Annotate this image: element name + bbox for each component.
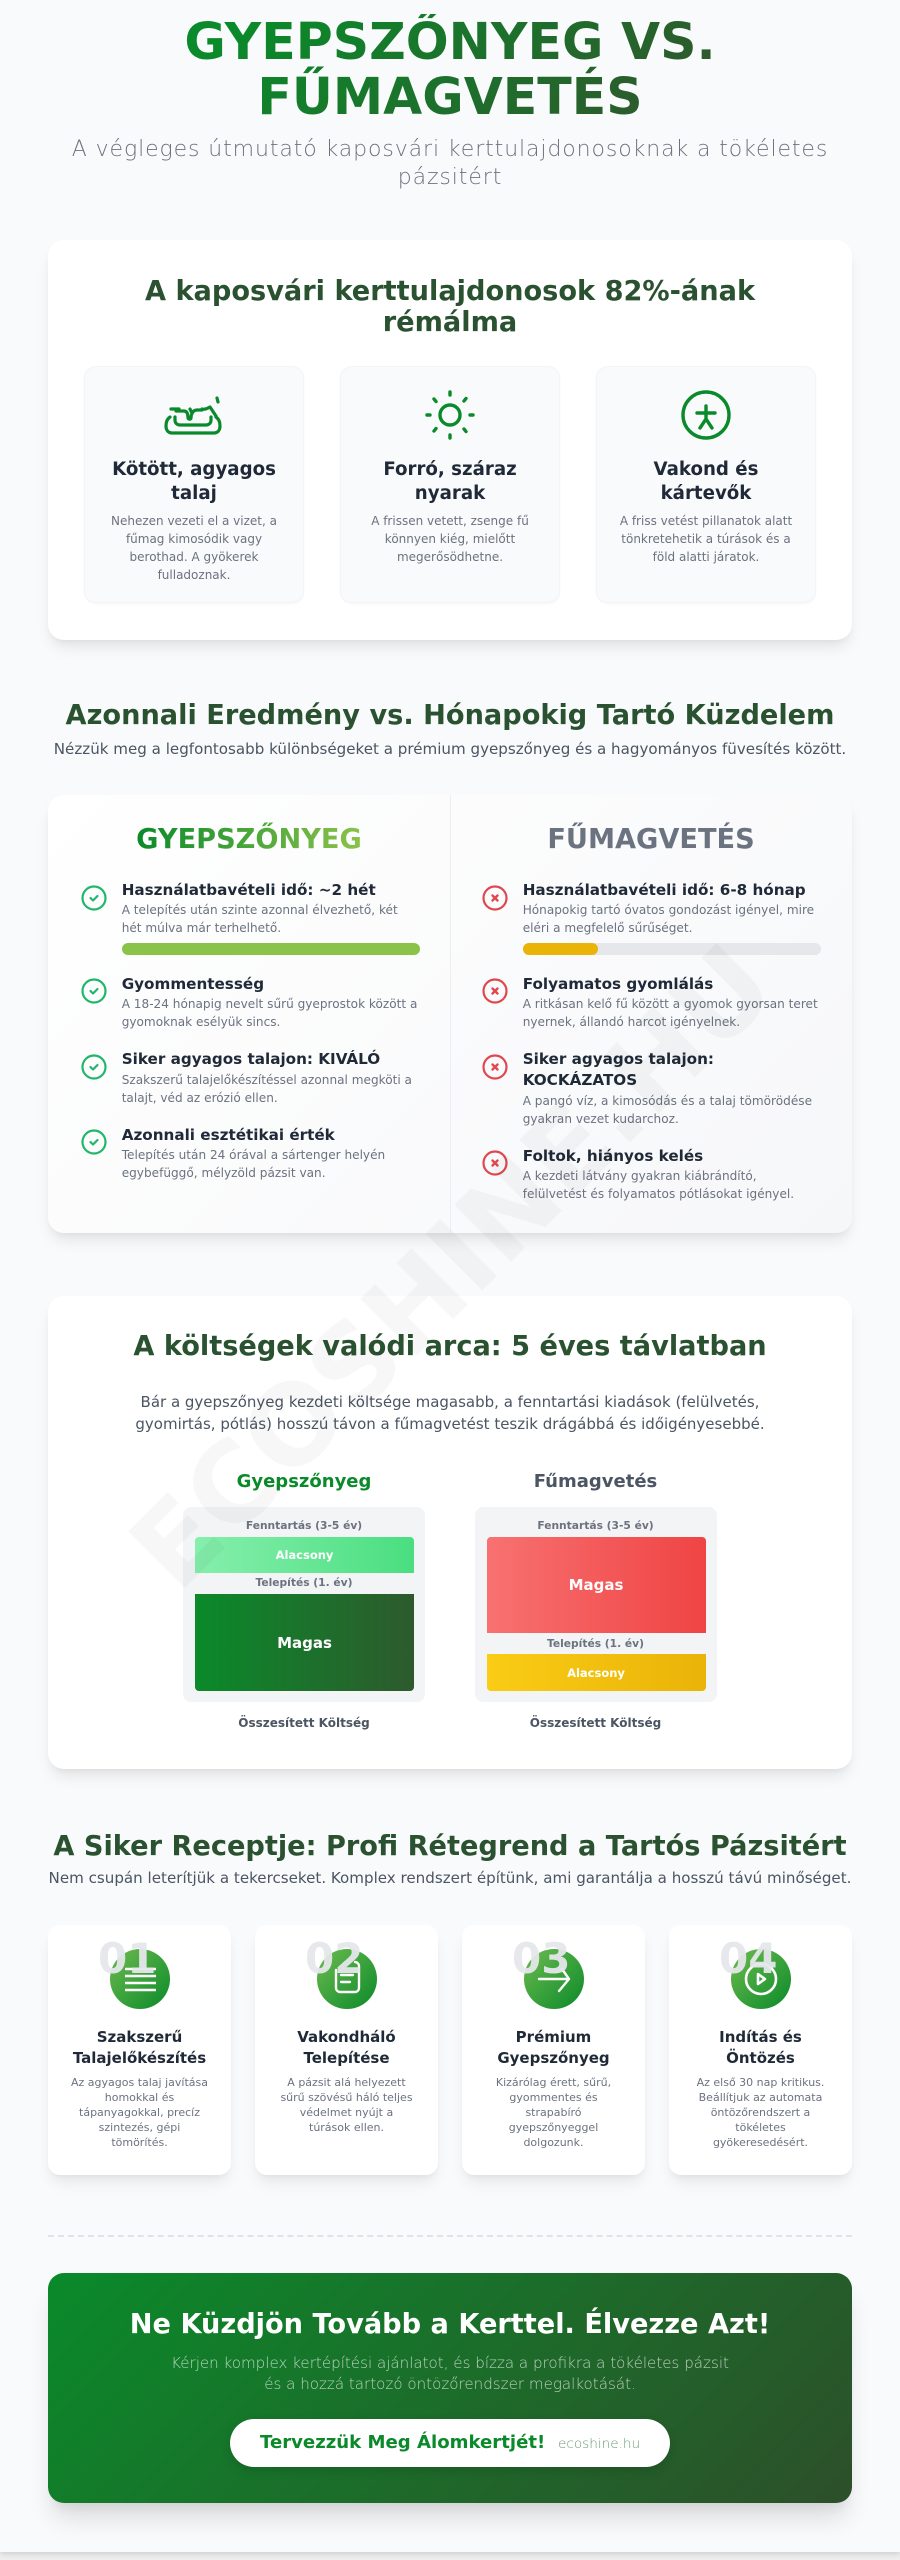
panel text: gyomirtás, pótlás) hosszú távon a fűmagvetést teszik drágábbá és időigényesebbé. [135, 1414, 765, 1432]
icon: layers lines [110, 1949, 170, 2009]
column divider [450, 795, 451, 1233]
step text [71, 2076, 208, 2149]
subtitle [72, 137, 828, 190]
label: Telepítés (1. év) [256, 1576, 352, 1589]
icon: clay soil [164, 396, 222, 435]
icon: mesh box [316, 1949, 376, 2009]
icon: check 3 [81, 1054, 107, 1080]
panel: comparison [48, 795, 852, 1233]
item: clay: talajt, véd az erózió ellen. [122, 1090, 278, 1104]
card title: nyarak [415, 483, 485, 504]
cta text [171, 2354, 729, 2392]
progress bar: partial [523, 943, 821, 955]
item: weeds: gyomoknak esélyük sincs. [122, 1015, 280, 1029]
item: patches: felülvetést és folyamatos pótlásokat igényel. [523, 1187, 794, 1201]
step card 1 [48, 1925, 231, 2175]
card title: Vakond és [654, 459, 758, 480]
item: patches: Foltok, hiányos kelés [523, 1146, 703, 1164]
subtitle: A végleges útmutató kaposvári kerttulajdonosoknak a tökéletes [72, 137, 828, 162]
step text: védelmet nyújt a [300, 2106, 393, 2119]
icon: play circle [730, 1949, 790, 2009]
column heading: gyepszonyeg: GYEPSZŐNYEG [136, 824, 362, 855]
step text: szintezés, gépi [99, 2121, 180, 2134]
step title: Szakszerű [97, 2028, 182, 2046]
step number: 04 [719, 1934, 777, 1983]
panel text [135, 1393, 765, 1432]
step text: gyepszőnyeggel [509, 2121, 598, 2134]
panel: costs [48, 1296, 852, 1769]
card text [371, 514, 529, 564]
icon: cross 3 [482, 1054, 508, 1080]
section heading: comparison: Azonnali Eredmény vs. Hónapokig Tartó Küzdelem [66, 700, 834, 731]
step text: strapabíró [525, 2106, 582, 2119]
cta text: Kérjen komplex kertépítési ajánlatot, és bízza a profikra a tökéletes pázsit [171, 2354, 729, 2372]
card text: A frissen vetett, zsenge fű [371, 514, 529, 528]
card text: berothad. A gyökerek [130, 550, 258, 564]
card text: A friss vetést pillanatok alatt [620, 514, 792, 528]
item: time [122, 880, 398, 935]
chart caption: Összesített Költség [238, 1716, 370, 1730]
step text: túrások ellen. [309, 2121, 384, 2134]
step title [719, 2028, 802, 2067]
icon: sun [425, 390, 475, 440]
panel heading: A költségek valódi arca: 5 éves távlatban [133, 1331, 767, 1362]
card title [654, 459, 758, 504]
bar segment: high install [195, 1594, 414, 1691]
item: clay: Szakszerű talajelőkészítéssel azonnal megköti a [122, 1072, 412, 1086]
step title: Öntözés [726, 2049, 795, 2067]
item: weeds: A 18-24 hónapig nevelt sűrű gyeprostok között a [122, 997, 417, 1011]
bar segment: low install: Alacsony [567, 1666, 625, 1680]
step number: 03 [512, 1934, 570, 1983]
step title [297, 2028, 396, 2067]
progress bar: full [122, 943, 420, 955]
item: clay risk: Siker agyagos talajon: [523, 1050, 714, 1068]
card text [620, 514, 792, 564]
card title: kártevők [661, 483, 751, 504]
card text: könnyen kiég, mielőtt [385, 532, 515, 546]
card text: fűmag kimosódik vagy [126, 532, 262, 546]
step text: gyommentes és [509, 2091, 598, 2104]
label: Fenntartás (3-5 év) [246, 1519, 362, 1532]
section subheading: comparison: Nézzük meg a legfontosabb különbségeket a prémium gyepszőnyeg és a hagyományos füvesítés között. [54, 740, 846, 758]
step text: A pázsit alá helyezett [287, 2076, 406, 2089]
step title: Prémium [516, 2028, 591, 2046]
step card 2 [255, 1925, 438, 2175]
item: weeding: nyernek, állandó harcot igényelnek. [523, 1015, 740, 1029]
step title [72, 2028, 206, 2067]
bar segment: high maintenance: Magas [569, 1576, 623, 1594]
cta heading: Ne Küzdjön Tovább a Kerttel. Élvezze Azt! [130, 2309, 770, 2340]
card title: Forró, száraz [383, 459, 517, 480]
icon: check 2 [81, 978, 107, 1004]
title [0, 14, 900, 124]
step card 4 [669, 1925, 852, 2175]
panel heading: A kaposvári kerttulajdonosok 82%-ának [145, 276, 755, 306]
panel heading [145, 276, 756, 338]
step text: sűrű szövésű háló teljes [280, 2091, 413, 2104]
step title: Vakondháló [297, 2028, 396, 2046]
button link: ecoshine.hu [558, 2436, 640, 2452]
step text: Beállítjuk az automata [699, 2091, 822, 2104]
problem card: hot summer [340, 366, 560, 603]
problem card: clay soil [84, 366, 304, 603]
chart caption: Összesített Költség [530, 1716, 661, 1730]
step text: tökéletes [735, 2121, 786, 2134]
label: Fenntartás (3-5 év) [537, 1519, 654, 1532]
bar segment: high maintenance [486, 1537, 706, 1633]
card title: talaj [171, 483, 217, 504]
stacked chart: gyepszonyeg [183, 1507, 425, 1702]
item: clay risk: KOCKÁZATOS [523, 1071, 637, 1089]
bar segment: low maintenance [195, 1537, 414, 1573]
item: aesthetics: Azonnali esztétikai érték [122, 1126, 335, 1144]
item: clay risk: gyakran vezet kudarchoz. [523, 1112, 679, 1126]
item: time: Használatbavételi idő: ~2 hét [122, 880, 376, 898]
icon: cross 1 [482, 885, 508, 911]
bar segment: high install: Magas [277, 1634, 332, 1652]
button label: Tervezzük Meg Álomkertjét! [260, 2432, 545, 2453]
item: clay risk: A pangó víz, a kimosódás és a talaj tömörödése [523, 1094, 812, 1108]
icon: cross 4 [482, 1150, 508, 1176]
icon: cross 2 [482, 978, 508, 1004]
item: aesthetics: egybefüggő, mélyzöld pázsit van. [122, 1166, 326, 1180]
step text [496, 2076, 611, 2149]
item: aesthetics: Telepítés után 24 órával a sártenger helyén [122, 1148, 385, 1162]
section heading: steps: A Siker Receptje: Profi Rétegrend a Tartós Pázsitért [53, 1830, 847, 1862]
step text: dolgozunk. [523, 2136, 584, 2149]
step text: tápanyagokkal, precíz [79, 2106, 200, 2119]
icon: circle figure [681, 390, 731, 440]
cta text: és a hozzá tartozó öntözőrendszer megalkotását. [264, 2374, 636, 2392]
item: weeding: A ritkásan kelő fű között a gyomok gyorsan teret [523, 997, 818, 1011]
step title: Indítás és [719, 2028, 802, 2046]
card text: tönkretehetik a túrások és a [621, 532, 791, 546]
column heading: fumagvetes: FŰMAGVETÉS [547, 824, 755, 855]
bar segment: low install [486, 1654, 706, 1691]
icon: check 4 [81, 1129, 107, 1155]
watermark: ECOSHINE.HU [106, 921, 798, 1613]
card title [112, 459, 276, 504]
card text: megerősödhetne. [397, 550, 503, 564]
step number: 02 [305, 1934, 363, 1983]
icon: arrow [524, 1949, 584, 2009]
card title: Kötött, agyagos [112, 459, 276, 480]
step title [497, 2028, 610, 2067]
step text: Kizárólag érett, sűrű, [496, 2076, 611, 2089]
step number: 01 [98, 1934, 156, 1983]
item: clay risk [522, 1050, 812, 1126]
icon: check 1 [81, 885, 107, 911]
item: patches [522, 1146, 794, 1201]
chart heading: fumagvetes: Fűmagvetés [534, 1471, 657, 1492]
card text [111, 514, 277, 582]
step title: Gyepszőnyeg [497, 2049, 610, 2067]
card text: fulladoznak. [158, 568, 230, 582]
step text: Az agyagos talaj javítása [71, 2076, 208, 2089]
stacked chart: fumagvetes [474, 1507, 716, 1702]
card title [383, 459, 517, 504]
item: weeds: Gyommentesség [122, 974, 264, 992]
item: aesthetics [122, 1126, 385, 1180]
step title: Telepítése [303, 2049, 390, 2067]
cta button [230, 2419, 670, 2467]
step text: tömörítés. [111, 2136, 168, 2149]
step text: öntözőrendszert a [711, 2106, 810, 2119]
item: time: eléri a megfelelő sűrűséget. [523, 921, 692, 935]
step text: gyökeresedésért. [713, 2136, 808, 2149]
card text: föld alatti járatok. [653, 550, 759, 564]
item: time: hét múlva már terhelhető. [122, 921, 281, 935]
item: weeding: Folyamatos gyomlálás [523, 974, 713, 992]
panel: problems [48, 240, 852, 640]
step text: Az első 30 nap kritikus. [697, 2076, 824, 2089]
panel text: Bár a gyepszőnyeg kezdeti költsége magasabb, a fenntartási kiadások (felülvetés, [141, 1393, 759, 1411]
step title: Talajelőkészítés [73, 2049, 206, 2067]
panel heading: rémálma [383, 306, 517, 338]
step card 3 [462, 1925, 645, 2175]
chart heading: gyepszonyeg: Gyepszőnyeg [237, 1471, 371, 1492]
step text [696, 2076, 824, 2149]
section subheading: steps: Nem csupán leterítjük a tekercseket. Komplex rendszert építünk, ami garantálja a hosszú távú minőséget. [49, 1869, 851, 1887]
panel: call to action [48, 2273, 852, 2503]
bar segment: low maintenance: Alacsony [276, 1548, 333, 1562]
item: patches: A kezdeti látvány gyakran kiábrándító, [523, 1169, 757, 1183]
item: time: Hónapokig tartó óvatos gondozást igényel, mire [523, 903, 814, 917]
item: time: Használatbavételi idő: 6-8 hónap [523, 880, 806, 898]
step text: homokkal és [105, 2091, 174, 2104]
title: FŰMAGVETÉS [257, 67, 643, 126]
item: weeding [522, 974, 818, 1029]
item: time [523, 880, 814, 935]
problem card: moles [596, 366, 816, 603]
subtitle: pázsitért [398, 164, 502, 190]
label: Telepítés (1. év) [547, 1637, 644, 1650]
item: clay: Siker agyagos talajon: KIVÁLÓ [122, 1050, 380, 1068]
card text: Nehezen vezeti el a vizet, a [111, 514, 277, 528]
item: time: A telepítés után szinte azonnal élvezhető, két [122, 903, 398, 917]
item: clay [122, 1050, 412, 1104]
item: weeds [122, 974, 417, 1029]
title: GYEPSZŐNYEG VS. [184, 12, 716, 71]
step text [280, 2076, 413, 2134]
